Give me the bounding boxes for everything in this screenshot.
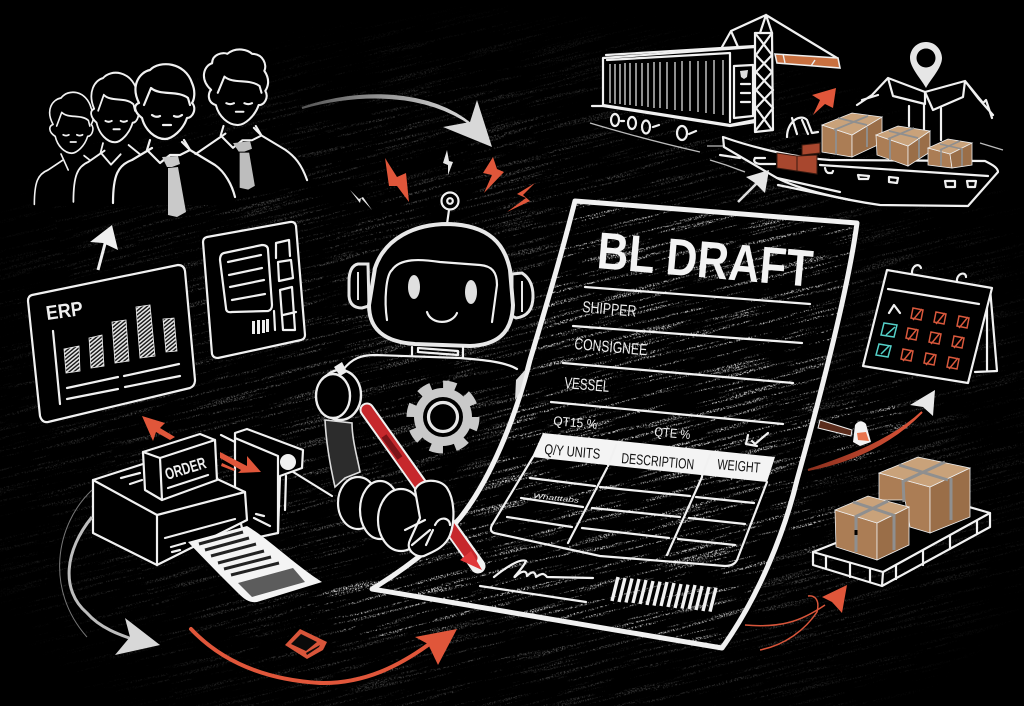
location pin (910, 42, 942, 88)
paper output (188, 526, 322, 602)
table grid (491, 445, 767, 566)
shoulder joint (316, 362, 361, 420)
barcode (612, 577, 716, 612)
column: weight: WEIGHT (717, 457, 761, 477)
gear (410, 384, 476, 450)
field: vessel: VESSEL (564, 375, 610, 396)
crane (722, 15, 840, 132)
neck (412, 347, 463, 357)
red arrow right (220, 452, 261, 473)
arrow: people to robot (302, 95, 492, 147)
signature line (480, 586, 586, 602)
small row text: Whatttabs (533, 493, 580, 505)
roller (280, 454, 296, 470)
column: description: DESCRIPTION (621, 451, 695, 473)
head (369, 224, 513, 346)
column: units: Q/Y UNITS (544, 442, 601, 463)
group of people (34, 49, 307, 217)
caret (889, 305, 900, 313)
cargo box A (822, 113, 882, 157)
pencil stub (818, 420, 871, 446)
lightning bolts (350, 150, 535, 212)
ship hull (720, 118, 998, 206)
panel: document screen (203, 222, 305, 358)
panel: ERP chart (28, 265, 195, 422)
calendar stand (975, 288, 997, 372)
cargo box C (928, 139, 972, 168)
arrow: to calendar (808, 390, 935, 470)
pallet (813, 500, 990, 586)
back unit (235, 429, 303, 540)
cargo box B (876, 126, 930, 166)
arrow: red to document (191, 629, 457, 683)
person 1 (34, 92, 122, 206)
torso outline (343, 355, 517, 370)
arm cable (290, 470, 332, 496)
form lines (551, 287, 810, 424)
shipping scene (590, 15, 1003, 206)
order box (143, 434, 217, 500)
water lines (590, 123, 1003, 172)
robot (316, 150, 535, 570)
order label: ORDER (163, 454, 208, 484)
red pen (367, 410, 482, 570)
white arrow to ship (738, 170, 769, 202)
arrow: grey loop (60, 490, 160, 655)
chassis and wheels (592, 106, 755, 140)
person 4 (195, 49, 307, 190)
ERP label: ERP (45, 298, 84, 325)
cargo on pallet (813, 457, 990, 586)
red crates (777, 143, 820, 174)
field: consignee: CONSIGNEE (574, 336, 648, 359)
table (491, 433, 775, 566)
icon: small red box (285, 629, 327, 659)
calendar rings (912, 265, 966, 282)
far arm (515, 369, 526, 400)
field: qty right: QTE % (654, 424, 691, 442)
printer body (93, 463, 247, 565)
document: BL draft (372, 201, 857, 648)
signature (494, 560, 593, 578)
calendar page (863, 270, 992, 383)
small box (835, 496, 909, 560)
orange arrow (812, 88, 836, 115)
table header band (532, 433, 775, 482)
checkmark (746, 433, 768, 446)
person 3 front (113, 64, 235, 217)
field: qty left: QT15 % (553, 413, 598, 432)
face (386, 260, 497, 322)
check grid (876, 308, 969, 369)
calendar (863, 265, 997, 383)
large box (879, 457, 970, 533)
printer machine (93, 416, 332, 602)
person 2 (73, 73, 171, 204)
red arrow up (142, 416, 175, 441)
upper arm (325, 420, 360, 487)
mountains and tent (857, 78, 993, 140)
chalk smears (300, 201, 908, 648)
container (603, 46, 755, 125)
bar chart (53, 305, 180, 404)
field: shipper: SHIPPER (582, 299, 637, 321)
title: BL DRAFT (595, 222, 815, 299)
antenna (442, 192, 458, 224)
arrow: ERP to people (90, 225, 118, 270)
hand (338, 477, 453, 556)
paper outline (372, 201, 857, 648)
arrow: document to pallet (745, 585, 847, 650)
ears (349, 264, 533, 318)
